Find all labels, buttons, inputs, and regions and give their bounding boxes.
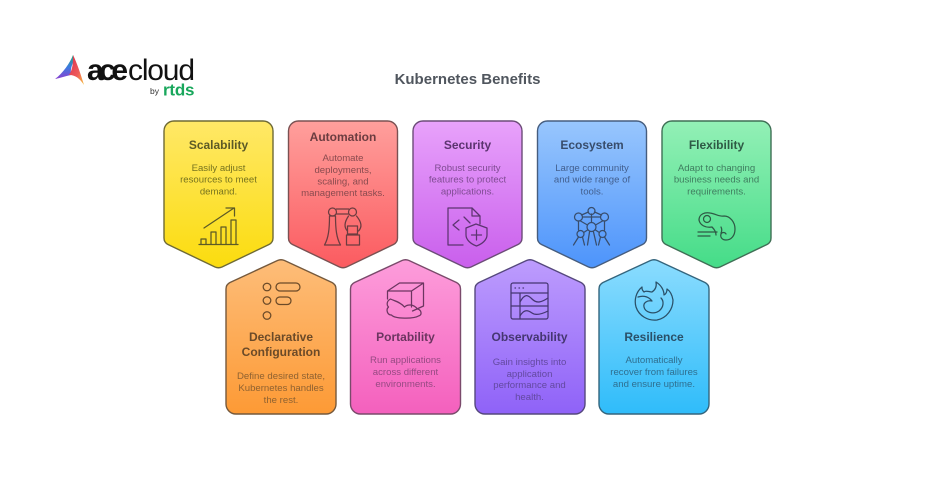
- description: the rest.: [264, 395, 298, 406]
- description: performance and: [493, 380, 566, 391]
- icon: robot arm: [324, 208, 361, 245]
- description: Run applications: [370, 355, 441, 366]
- logo: acecloud by rtds: [55, 54, 195, 100]
- panel: Security: [413, 121, 522, 268]
- description: environments.: [375, 379, 436, 390]
- description: Kubernetes handles: [238, 383, 324, 394]
- heading: Ecosystem: [560, 138, 624, 152]
- description: demand.: [200, 186, 237, 197]
- heading: Automation: [310, 130, 376, 144]
- description: health.: [515, 392, 544, 403]
- logo wordmark: cloud: [128, 54, 195, 87]
- description: requirements.: [687, 186, 746, 197]
- panel: Resilience: [599, 260, 709, 414]
- description: Large community: [555, 163, 629, 174]
- description: Adapt to changing: [678, 163, 755, 174]
- description: applications.: [441, 186, 494, 197]
- icon: code file with shield: [448, 208, 487, 246]
- heading: Configuration: [242, 345, 320, 359]
- icon: growth chart: [199, 208, 238, 244]
- description: features to protect: [429, 175, 506, 186]
- description: tools.: [581, 186, 603, 197]
- description: Automate: [322, 153, 364, 164]
- description: and wide range of: [554, 175, 630, 186]
- icon: logo triangle mark: [55, 55, 84, 85]
- logo byline: rtds: [163, 80, 194, 100]
- icon: monitoring dashboard: [511, 283, 548, 319]
- description: application: [507, 369, 552, 380]
- panel: Ecosystem: [538, 121, 646, 268]
- heading: Observability: [491, 330, 568, 344]
- icon: configuration list: [263, 283, 300, 319]
- description: management tasks.: [301, 188, 385, 199]
- panel: Automation: [288, 121, 398, 268]
- description: Robust security: [434, 163, 501, 174]
- heading: Scalability: [189, 138, 248, 152]
- description: deployments,: [314, 165, 372, 176]
- icon: molecule network: [574, 208, 610, 245]
- panel: Scalability: [164, 121, 273, 268]
- description: and ensure uptime.: [613, 379, 695, 390]
- logo byline: by: [150, 86, 160, 96]
- panel: Portability: [350, 260, 460, 414]
- heading: Portability: [376, 330, 435, 344]
- panel: Observability: [475, 260, 585, 414]
- heading: Flexibility: [689, 138, 744, 152]
- heading: Security: [444, 138, 492, 152]
- logo wordmark: [87, 54, 195, 87]
- description: Define desired state,: [237, 371, 325, 382]
- icon: box on cloud: [387, 283, 424, 318]
- title: Kubernetes Benefits: [395, 71, 540, 88]
- description: resources to meet: [180, 175, 257, 186]
- description: recover from failures: [610, 367, 698, 378]
- description: scaling, and: [317, 176, 369, 188]
- icon: flame globe: [635, 282, 673, 320]
- description: business needs and: [674, 175, 759, 186]
- heading: Declarative: [249, 330, 313, 344]
- icon: chameleon: [698, 213, 735, 240]
- panel: Flexibility: [662, 121, 771, 268]
- description: across different: [373, 367, 439, 378]
- panel: Declarative Configuration: [226, 260, 336, 414]
- logo wordmark: ace: [87, 54, 128, 87]
- heading: Resilience: [624, 330, 684, 344]
- description: Gain insights into: [493, 357, 566, 368]
- description: Automatically: [625, 355, 683, 366]
- description: Easily adjust: [192, 163, 246, 174]
